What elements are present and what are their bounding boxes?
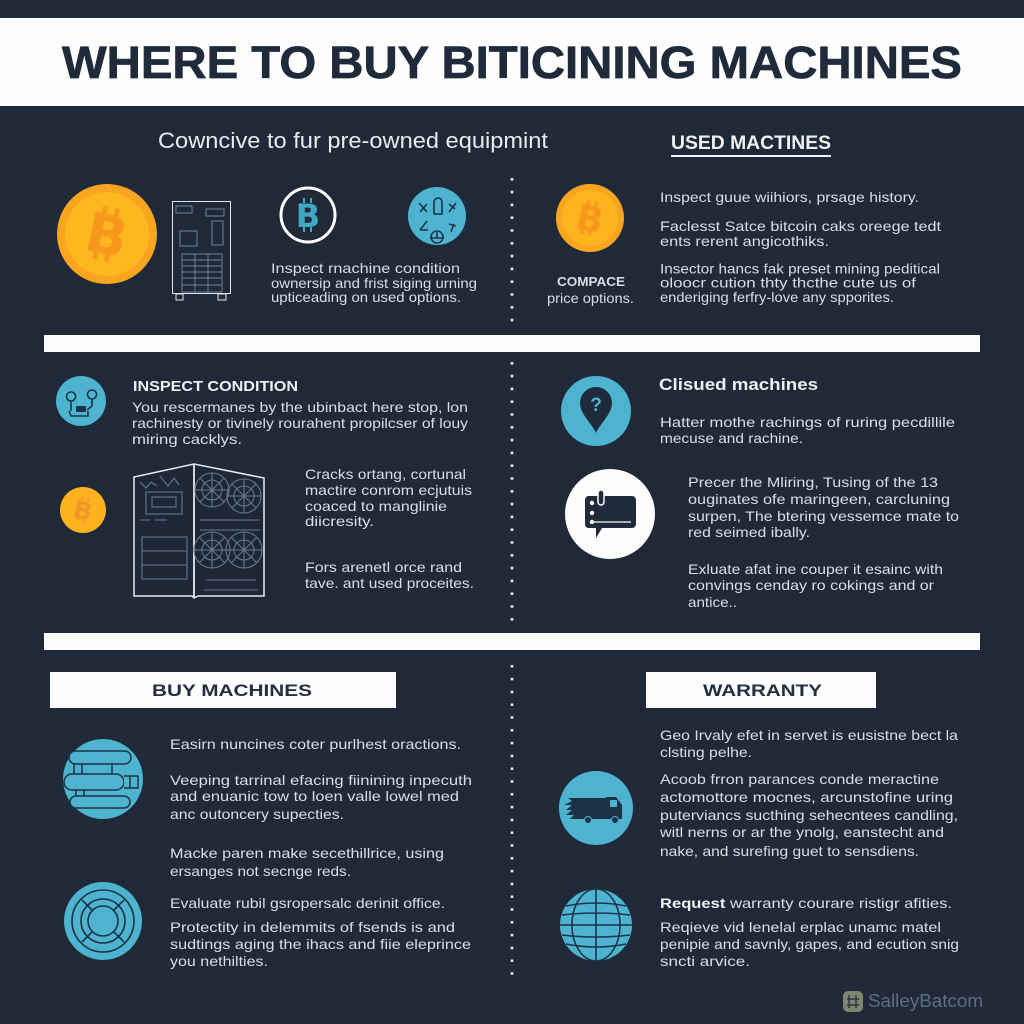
text: used prices: Fors arenetl orce rand xyxy=(305,559,462,575)
icon: bitcoin coin: B xyxy=(71,495,95,527)
icon: location pin with question mark xyxy=(561,376,631,446)
text: used prices xyxy=(305,559,474,591)
icon: delivery truck xyxy=(559,771,633,845)
text: closed machines intro: mecuse and rachine. xyxy=(660,430,803,446)
heading: closed machines: Clisued machines xyxy=(659,375,818,394)
text: inspect condition details: miring cacklys. xyxy=(132,431,242,447)
title banner xyxy=(0,18,1024,106)
text: cracks and condition xyxy=(305,466,472,529)
text: mining origin details: ouginates ofe maringeen, carcluning xyxy=(688,491,950,507)
text: inspect condition details xyxy=(132,399,468,447)
text: used machines details: ents rerent angicothiks. xyxy=(660,233,829,249)
icon: small bitcoin coin xyxy=(556,184,624,252)
text: mining origin details: red seimed ibally. xyxy=(688,524,810,540)
text: evaluate and protect: Evaluate rubil gsropersalc derinit office. xyxy=(170,895,445,911)
text: mining origin details: Precer the Mliring, Tusing of the 13 xyxy=(688,474,938,490)
title banner: WHERE TO BUY BITICINING MACHINES xyxy=(62,37,962,88)
icon: circular shield xyxy=(64,882,142,960)
text: warranty details xyxy=(659,771,958,859)
text: mining origin details xyxy=(688,474,959,540)
icon: bitcoin badge xyxy=(281,188,335,242)
text: used prices: tave. ant used proceites. xyxy=(305,575,474,591)
text: make payment: Macke paren make secethillrice, using xyxy=(170,845,444,861)
text: evaluate and protect xyxy=(170,895,471,969)
text: request warranty: Reqieve vid lenelal erplac unamc matel xyxy=(660,919,941,935)
text: inspect condition details: rachinesty or tivinely rourahent propilcser of louy xyxy=(132,415,468,431)
text: cracks and condition: coaced to manglinie xyxy=(305,498,447,514)
text: warranty intro: Geo Irvaly efet in servet is eusistne bect la xyxy=(660,727,958,743)
text: inspect machine condition xyxy=(271,260,477,305)
text: used machines details: Faclesst Satce bitcoin caks oreege tedt xyxy=(660,218,941,234)
text: evaluate coupler: convings cenday ro cokings and or xyxy=(688,577,934,593)
text: request warranty: Request warranty courare ristigr afities. xyxy=(660,895,952,911)
text: compare price options: COMPACE xyxy=(557,275,625,289)
text: evaluate and protect: Protectity in delemmits of fsends is and xyxy=(170,919,455,935)
text: request warranty xyxy=(660,895,959,969)
text: buy machines options: Easirn nuncines coter purlhest oractions. xyxy=(170,736,461,752)
text: make payment: ersanges not secnge reds. xyxy=(170,863,351,879)
heading: used machines: USED MACTINES xyxy=(671,133,831,154)
heading: pre-owned equipment: Cowncive to fur pre-owned equipmint xyxy=(158,128,548,153)
text: used machines details xyxy=(660,189,941,305)
icon: large bitcoin coin xyxy=(57,184,157,284)
text: used machines details: oloocr cution thty thcthe cute us of xyxy=(660,274,916,290)
icon: large bitcoin coin: B xyxy=(80,200,133,271)
heading box: warranty xyxy=(646,672,876,708)
text: warranty details: witl nerns or ar the ynolg, eanstecht and xyxy=(659,824,944,840)
icon: small bitcoin coin: B xyxy=(572,198,607,242)
text: warranty details: puterviancs sucthing sehecntees candling, xyxy=(660,807,958,823)
text: buy machines options xyxy=(170,736,472,822)
text: warranty details: Acoob frron parances conde meractine xyxy=(660,771,939,787)
text: compare price options: price options. xyxy=(547,291,634,306)
text: request warranty: penipie and savnly, gapes, and ecution snig xyxy=(660,936,959,952)
icon: globe xyxy=(560,889,632,961)
text: evaluate coupler: Exluate afat ine couper it esainc with xyxy=(688,561,943,577)
text: closed machines intro xyxy=(660,414,955,446)
icon: location pin with question mark: ? xyxy=(590,395,602,416)
text: evaluate and protect: sudtings aging the ihacs and fiie eleprince xyxy=(170,936,471,952)
text: evaluate coupler xyxy=(688,561,943,610)
text: closed machines intro: Hatter mothe rachings of ruring pecdillile xyxy=(660,414,955,430)
text: inspect machine condition: Inspect rnachine condition xyxy=(271,260,460,276)
text: warranty details: nake, and surefing guet to sensdiens. xyxy=(660,843,919,859)
text: evaluate and protect: you nethilties. xyxy=(170,953,268,969)
icon: bitcoin badge: B xyxy=(296,197,320,235)
icon: mining rig with fans xyxy=(134,464,264,598)
heading box: buy machines xyxy=(50,672,396,708)
text: used machines details: Insector hancs fak preset mining peditical xyxy=(660,260,940,276)
text: buy machines options: anc outoncery supecties. xyxy=(170,806,344,822)
heading box: warranty: WARRANTY xyxy=(703,681,823,700)
icon: teal inspection circle xyxy=(56,376,106,426)
icon: stacked hardware circle xyxy=(63,739,143,819)
text: inspect condition details: You rescermanes by the ubinbact here stop, lon xyxy=(132,399,468,415)
text: buy machines options: Veeping tarrinal efacing fiinining inpecuth xyxy=(170,772,472,788)
text: cracks and condition: mactire conrom ecjutuis xyxy=(305,482,472,498)
icon: bitcoin coin xyxy=(60,487,106,533)
text: inspect machine condition: upticeading on used options. xyxy=(271,289,461,305)
text: inspect machine condition: ownersip and frist siging urning xyxy=(271,275,477,291)
icon: mining machine outline xyxy=(172,202,230,300)
text: warranty intro: clsting pelhe. xyxy=(660,744,752,760)
icon: message bubble in white circle xyxy=(565,469,655,559)
text: evaluate coupler: antice.. xyxy=(688,594,737,610)
heading: inspect condition: INSPECT CONDITION xyxy=(133,378,298,395)
text: warranty intro xyxy=(660,727,958,760)
text: compare price options xyxy=(547,275,634,306)
heading box: buy machines: BUY MACHINES xyxy=(152,681,312,700)
text: used machines details: enderiging ferfry-love any spporites. xyxy=(660,289,894,305)
icon: teal tools circle xyxy=(408,187,466,245)
text: request warranty: sncti arvice. xyxy=(660,953,750,969)
text: used machines details: Inspect guue wiihiors, prsage history. xyxy=(660,189,919,205)
text: make payment xyxy=(170,845,444,879)
text: cracks and condition: Cracks ortang, cortunal xyxy=(305,466,466,482)
text: cracks and condition: diicresity. xyxy=(305,513,374,529)
text: warranty details: actomottore mocnes, arcunstofine uring xyxy=(660,789,953,805)
watermark: SalleyBatcom xyxy=(868,991,983,1011)
text: buy machines options: and enuanic tow to loen valle lowel med xyxy=(170,788,459,804)
text: mining origin details: surpen, The btering vessemce mate to xyxy=(688,508,959,524)
